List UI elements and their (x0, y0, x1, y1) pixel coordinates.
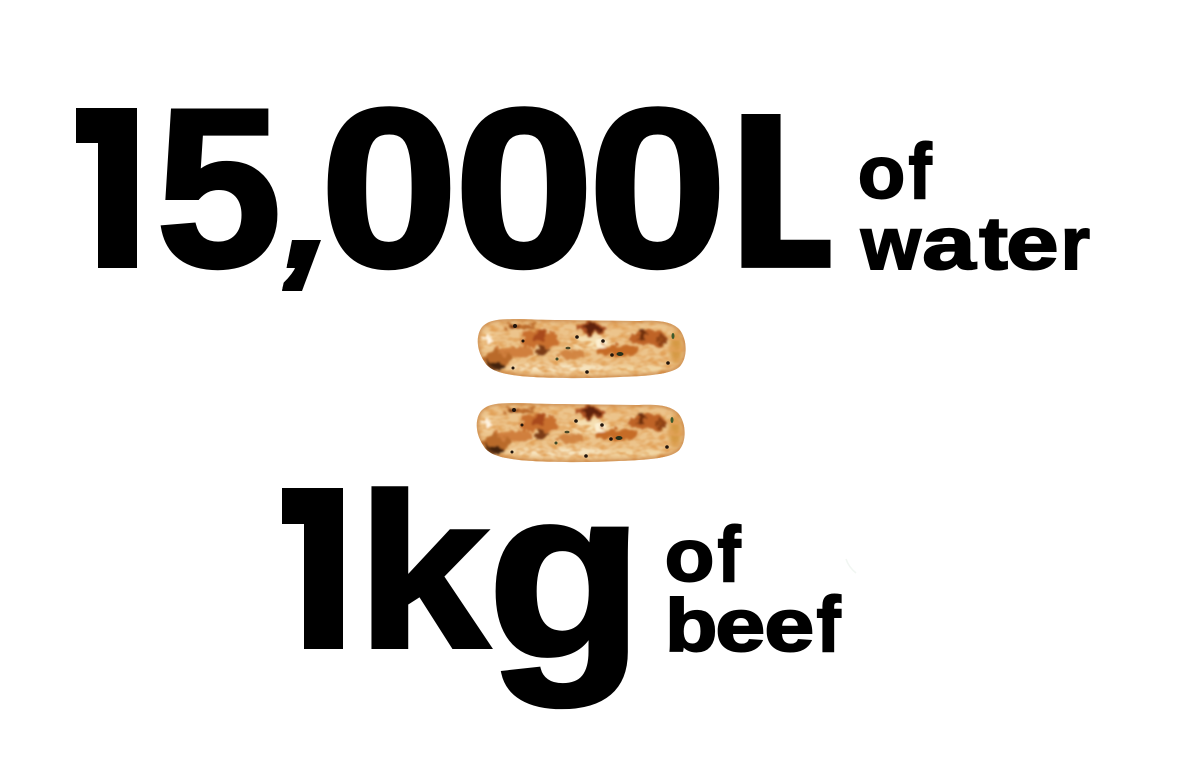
label: of water: f (909, 128, 932, 215)
label: of water: t (979, 202, 1008, 285)
digit 1 (76, 108, 137, 268)
label: of beef: b (665, 584, 717, 667)
label: of beef: f (817, 580, 842, 668)
digit 1 (282, 488, 343, 649)
label: of beef: f (718, 511, 741, 598)
label: of beef: o (665, 515, 714, 597)
big number: 15,000L (76, 106, 830, 291)
label: of water (858, 128, 1090, 285)
label: of beef (665, 511, 842, 668)
label: of beef: e (764, 585, 814, 667)
label: of water: w (860, 202, 921, 285)
icon: sausage equals sign (469, 315, 695, 469)
big number: 15,000L: 0 (588, 61, 727, 314)
label: of water: a (922, 202, 977, 285)
label: of water: e (1006, 202, 1058, 285)
big number: 15,000L: 5 (156, 61, 282, 314)
label: of water: r (1061, 202, 1090, 285)
digit 1: 1 (30, 57, 194, 315)
big number: 1kg: g (487, 438, 643, 707)
headline: 15,000L of water (76, 106, 1090, 291)
label: of beef: e (715, 585, 765, 667)
big number: 15,000L: 0 (454, 61, 594, 314)
big number: 15,000L: , (235, 62, 431, 314)
headline: 1kg of beef (282, 486, 842, 710)
big number: 15,000L: 0 (320, 62, 458, 315)
big number: 1kg (282, 486, 629, 710)
top sausage (470, 315, 695, 385)
big number: 15,000L: L (727, 69, 875, 312)
bottom sausage (469, 399, 694, 469)
label: of water: o (858, 132, 905, 215)
digit 1: 1 (236, 438, 400, 696)
big number: 1kg: k (357, 449, 490, 694)
